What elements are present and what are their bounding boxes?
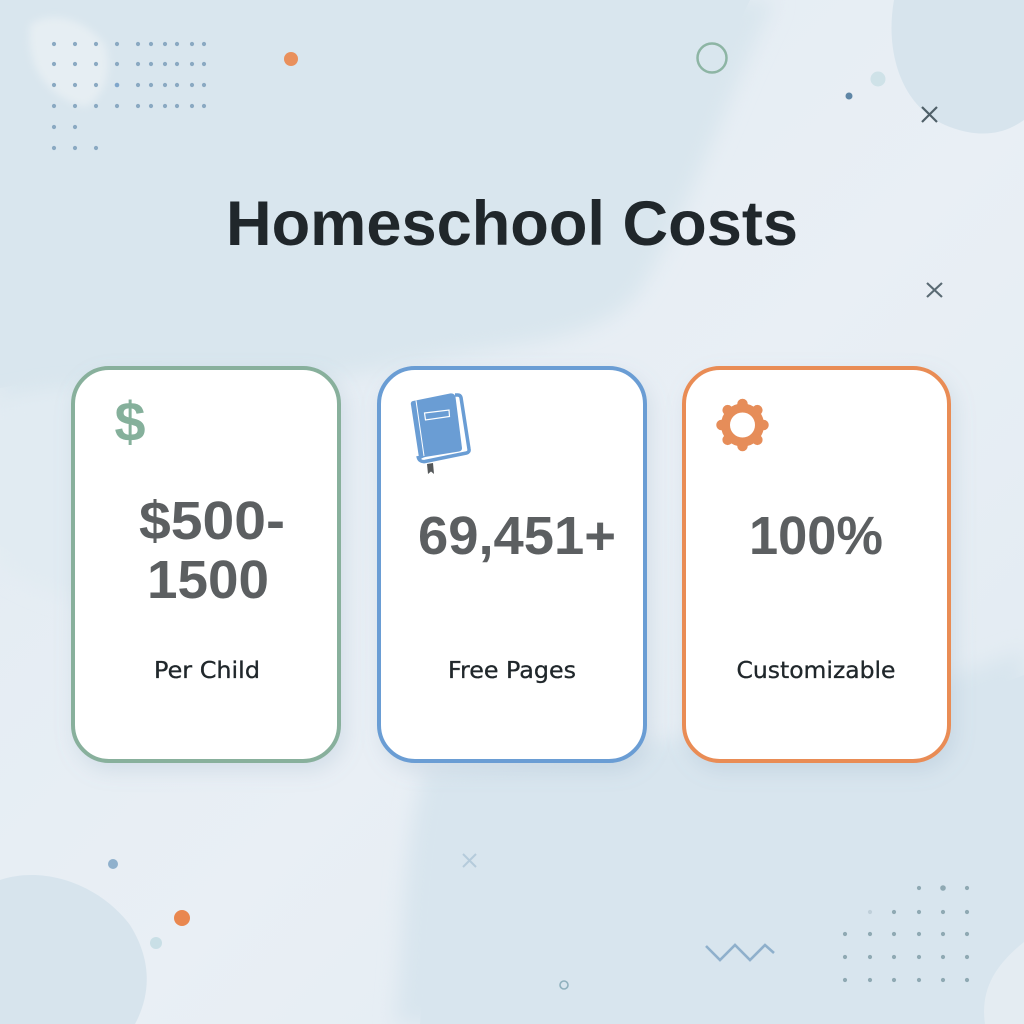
accent: green ring (698, 44, 726, 72)
icon: book (411, 393, 469, 474)
value: 100%: 100% (749, 506, 883, 566)
accent: bottom left dots (108, 859, 190, 949)
accent: small ring bottom (560, 981, 568, 989)
decorative blob: bottom left (0, 875, 147, 1024)
accent: orange dot top (284, 52, 298, 66)
value: 69,451+: 69,451+ (418, 506, 616, 566)
label: free pages: Free Pages (448, 658, 576, 684)
value: $500-1500: 1500 (147, 550, 269, 610)
icon: gear (722, 404, 764, 446)
value: $500-1500: $500- (139, 491, 285, 551)
icon: dollar sign: $ (114, 390, 146, 453)
accent: cross below title (927, 283, 942, 297)
label: per child: Per Child (154, 658, 260, 684)
panel: customizable (684, 368, 949, 761)
dot grid: top left (52, 42, 206, 150)
dot grid: bottom right (843, 885, 969, 982)
panel: per child (73, 368, 339, 761)
decorative blob: top right (892, 0, 1024, 134)
accent: small dots top right (846, 72, 886, 100)
accent: faint cross bottom (463, 854, 476, 867)
panel: free pages (379, 368, 645, 761)
value: $500-1500 (139, 491, 285, 610)
title: Homeschool Costs (226, 189, 798, 259)
accent: cross top right (922, 107, 937, 122)
accent: zigzag (706, 945, 774, 960)
label: customizable: Customizable (736, 658, 896, 684)
